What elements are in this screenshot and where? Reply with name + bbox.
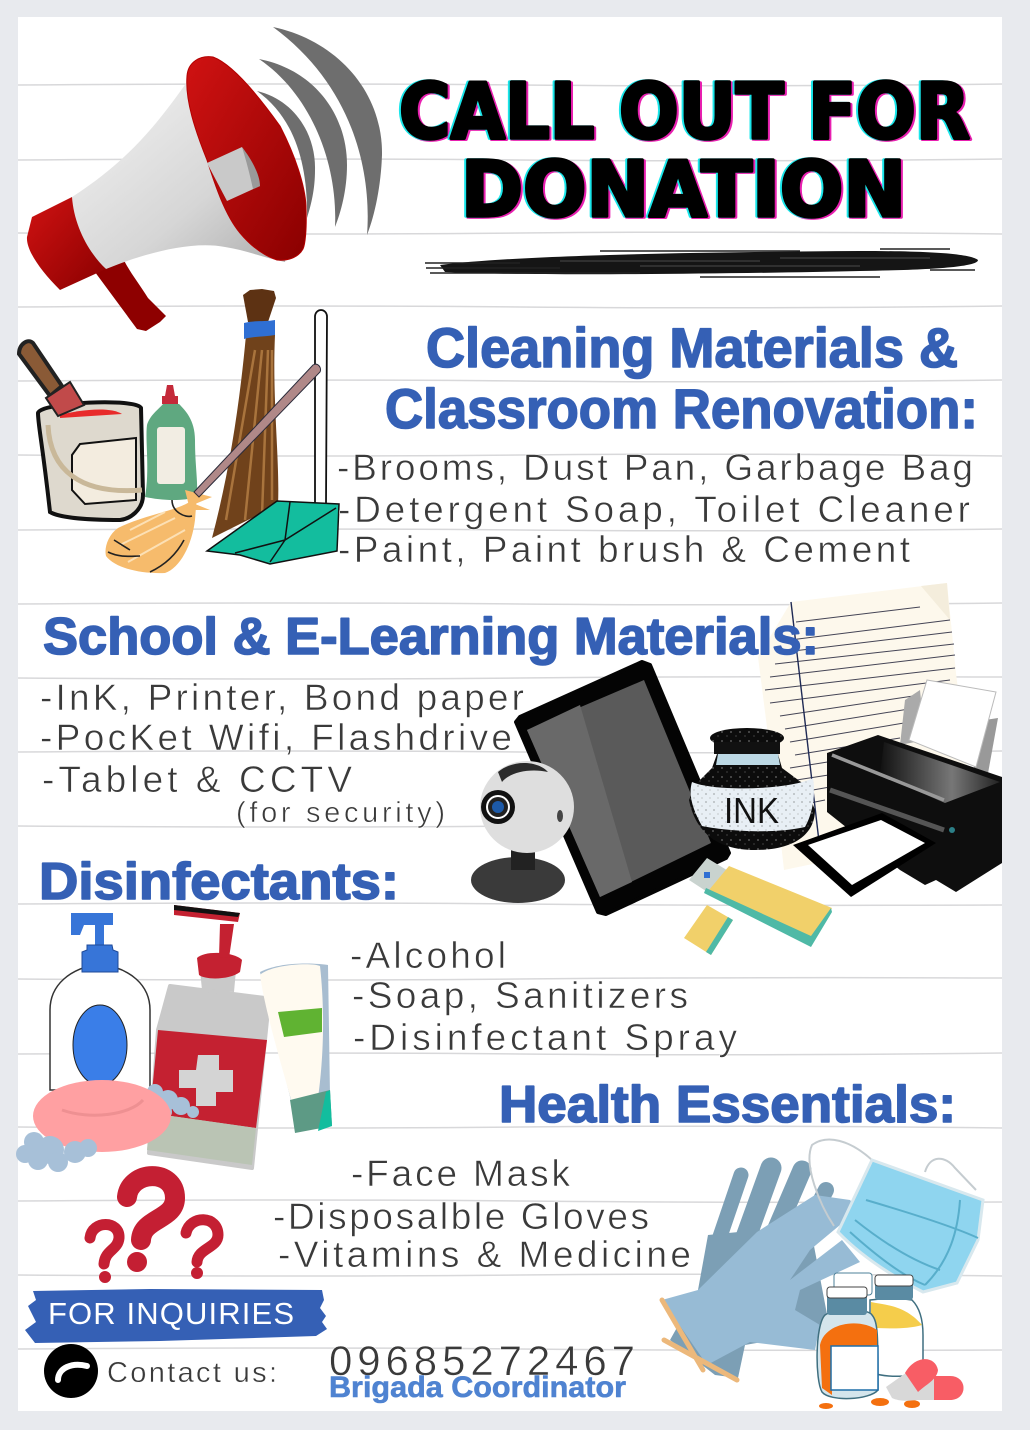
icon: gloves bbox=[662, 1168, 860, 1380]
icon: broom bbox=[212, 289, 278, 538]
icon: detergent bottle bbox=[145, 385, 197, 500]
title: DONATION bbox=[461, 146, 906, 235]
heading: health essentials: Health Essentials: bbox=[499, 1076, 956, 1134]
icon: sanitizer bottle bbox=[147, 905, 267, 1168]
list: school materials: (for security) bbox=[236, 797, 445, 829]
contact label: Contact us: bbox=[107, 1357, 277, 1389]
icon: lined paper bbox=[758, 583, 975, 870]
icon: megaphone bbox=[27, 27, 382, 331]
icon: tablet bbox=[516, 662, 729, 914]
list: school materials: -Tablet & CCTV bbox=[42, 759, 352, 800]
icon: printer sheet bbox=[900, 680, 998, 790]
icon: cream tube bbox=[260, 964, 332, 1133]
list: cleaning materials: -Detergent Soap, Toilet Cleaner bbox=[338, 489, 970, 530]
icon: dustpan handle bbox=[315, 310, 327, 505]
list: school materials bbox=[40, 677, 524, 829]
speaker bbox=[207, 147, 260, 201]
icon: mop head bbox=[106, 490, 212, 573]
icon: webcam bbox=[471, 761, 574, 903]
list: disinfectants: -Disinfectant Spray bbox=[353, 1017, 738, 1058]
list: health essentials: -Face Mask bbox=[351, 1153, 570, 1194]
list: cleaning materials bbox=[337, 447, 973, 570]
heading: school and e-learning materials: School & E-Learning Materials: bbox=[43, 608, 819, 666]
rear cap bbox=[27, 197, 106, 290]
icon: question marks bbox=[90, 1176, 218, 1282]
illustration: disinfectants bbox=[16, 905, 332, 1172]
sound waves bbox=[257, 27, 382, 235]
contact row bbox=[44, 1337, 635, 1404]
banner: for inquiries: FOR INQUIRIES bbox=[48, 1296, 294, 1331]
coordinator name: Brigada Coordinator bbox=[329, 1371, 626, 1404]
horn body bbox=[72, 80, 300, 269]
phone number: 09685272467 bbox=[329, 1337, 635, 1384]
title bbox=[399, 68, 970, 235]
horn mouth bbox=[187, 57, 306, 260]
list: cleaning materials: -Paint, Paint brush & Cement bbox=[338, 529, 911, 570]
icon: USB flash drive bbox=[684, 858, 832, 955]
icon: medicine bottles bbox=[817, 1273, 923, 1409]
icon: printer bbox=[793, 735, 1002, 897]
heading: disinfectants: Disinfectants: bbox=[39, 853, 399, 911]
list: disinfectants: -Soap, Sanitizers bbox=[352, 975, 688, 1016]
icon: paint brush bbox=[19, 341, 62, 396]
yellow pill bottle bbox=[870, 1275, 923, 1376]
icon: pump bottle bbox=[50, 913, 150, 1090]
list: health essentials: -Disposalble Gloves bbox=[273, 1196, 649, 1237]
list: school materials: -PocKet Wifi, Flashdrive bbox=[40, 717, 512, 758]
list: health essentials bbox=[273, 1153, 691, 1275]
list: disinfectants: -Alcohol bbox=[350, 935, 506, 976]
icon: ink jar: INK bbox=[724, 790, 779, 831]
list: health essentials: -Vitamins & Medicine bbox=[278, 1234, 691, 1275]
heading: cleaning materials bbox=[385, 316, 978, 440]
illustration: health essentials bbox=[662, 1140, 983, 1409]
brush stroke divider bbox=[425, 249, 978, 277]
icon: dustpan bbox=[207, 501, 339, 564]
orange pill bottle bbox=[817, 1287, 878, 1399]
icon: ink jar bbox=[689, 728, 815, 850]
icon: face mask bbox=[809, 1140, 983, 1292]
icon: soap bar bbox=[16, 1080, 199, 1172]
list: cleaning materials: -Brooms, Dust Pan, Garbage Bag bbox=[337, 447, 973, 488]
icon: paint bucket bbox=[19, 341, 143, 520]
icon: phone bbox=[44, 1344, 98, 1398]
handle bbox=[92, 256, 166, 331]
illustration: cleaning materials bbox=[19, 289, 339, 573]
heading: cleaning materials: Cleaning Materials & bbox=[426, 316, 958, 379]
list: disinfectants bbox=[350, 935, 738, 1058]
heading: cleaning materials: Classroom Renovation: bbox=[385, 377, 978, 440]
icon: mop handle bbox=[194, 364, 321, 497]
icon: capsules bbox=[886, 1359, 964, 1401]
illustration: e-learning materials bbox=[471, 583, 1002, 955]
list: school materials: -InK, Printer, Bond paper bbox=[40, 677, 524, 718]
title: CALL OUT FOR bbox=[399, 68, 970, 157]
banner: for inquiries bbox=[25, 1289, 327, 1343]
